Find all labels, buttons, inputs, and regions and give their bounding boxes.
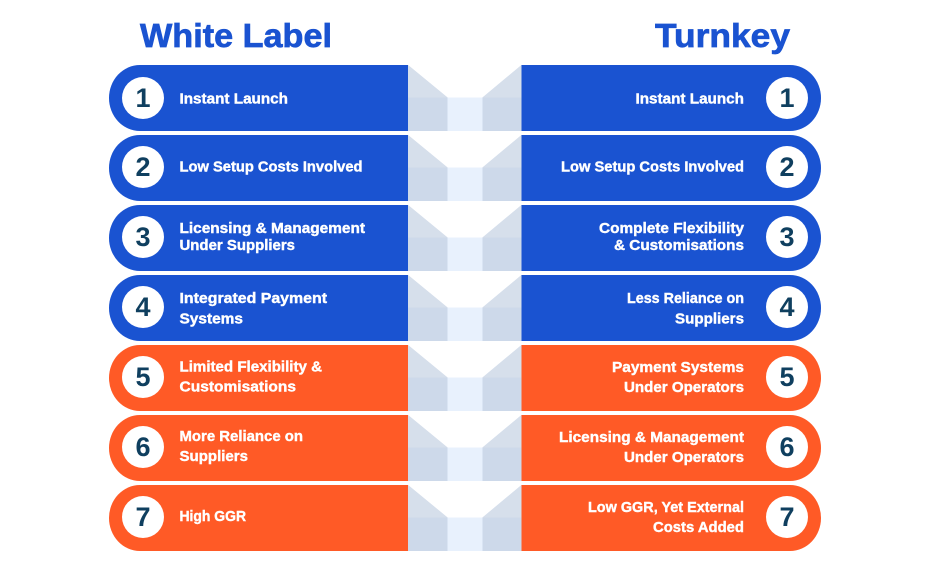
left text 3 xyxy=(180,221,365,254)
row 7 xyxy=(109,485,821,551)
left number 6: 6 xyxy=(135,432,151,462)
left number 3 xyxy=(122,216,164,258)
left text 6 xyxy=(180,429,303,465)
left text 2: Low Setup Costs Involved xyxy=(180,160,362,176)
right text 6: Licensing & Management xyxy=(559,430,744,446)
right number 5: 5 xyxy=(779,362,795,392)
left number 6 xyxy=(122,426,164,468)
left number 4 xyxy=(122,286,164,328)
left number 5 xyxy=(122,356,164,398)
right text 7: Low GGR, Yet External xyxy=(588,500,744,516)
left text 7: High GGR xyxy=(180,509,246,525)
right text 5 xyxy=(612,360,744,396)
right number 4 xyxy=(766,286,808,328)
right text 1: Instant Launch xyxy=(636,92,744,108)
right text 3: & Customisations xyxy=(614,238,744,254)
left text 6: More Reliance on xyxy=(180,429,303,445)
right number 6: 6 xyxy=(779,432,795,462)
left number 1 xyxy=(122,77,164,119)
left text 5 xyxy=(180,360,323,396)
right text 2: Low Setup Costs Involved xyxy=(561,160,744,176)
left text 4 xyxy=(180,291,327,328)
row 4 xyxy=(109,275,821,341)
right text 4 xyxy=(627,291,744,328)
left text 3: Under Suppliers xyxy=(180,238,295,254)
right bar 3 xyxy=(522,205,821,271)
row 6 xyxy=(109,415,821,481)
row 1 xyxy=(109,65,821,131)
right text 5: Under Operators xyxy=(624,380,744,396)
left text 5: Limited Flexibility & xyxy=(180,360,323,376)
left text 5: Customisations xyxy=(180,380,296,396)
connector 5 xyxy=(408,345,522,411)
right number 2 xyxy=(766,146,808,188)
right text 4: Suppliers xyxy=(675,312,744,328)
right text 6: Under Operators xyxy=(624,450,744,466)
right text 7: Costs Added xyxy=(653,520,744,536)
connector 2 xyxy=(408,135,522,201)
left text 4: Systems xyxy=(180,312,243,328)
left bar 5 xyxy=(109,345,408,411)
right number 3 xyxy=(766,216,808,258)
right bar 5 xyxy=(522,345,821,411)
left bar 1 xyxy=(109,65,408,131)
right number 7: 7 xyxy=(779,502,795,532)
right bar 2 xyxy=(522,135,821,201)
row 2 xyxy=(109,135,821,201)
right number 2: 2 xyxy=(779,152,795,182)
right bar 6 xyxy=(522,415,821,481)
connector 6 xyxy=(408,415,522,481)
right number 3: 3 xyxy=(779,222,795,252)
row 3 xyxy=(109,205,821,271)
title: Turnkey: Turnkey xyxy=(655,17,791,54)
right number 1 xyxy=(766,77,808,119)
connector 4 xyxy=(408,275,522,341)
right text 5: Payment Systems xyxy=(612,360,744,376)
left number 7: 7 xyxy=(135,502,151,532)
left number 2 xyxy=(122,146,164,188)
left text 4: Integrated Payment xyxy=(180,291,327,307)
right bar 7 xyxy=(522,485,821,551)
left number 2: 2 xyxy=(135,152,151,182)
left number 7 xyxy=(122,496,164,538)
left number 3: 3 xyxy=(135,222,151,252)
left number 1: 1 xyxy=(135,83,151,113)
left number 4: 4 xyxy=(135,292,151,322)
row 5 xyxy=(109,345,821,411)
right number 5 xyxy=(766,356,808,398)
title: White Label: White Label xyxy=(140,17,332,54)
right text 7 xyxy=(588,500,744,536)
left bar 6 xyxy=(109,415,408,481)
connector 7 xyxy=(408,485,522,551)
left text 6: Suppliers xyxy=(180,449,248,465)
left number 5: 5 xyxy=(135,362,151,392)
right bar 4 xyxy=(522,275,821,341)
connector 1 xyxy=(408,65,522,131)
right number 1: 1 xyxy=(779,83,795,113)
right text 4: Less Reliance on xyxy=(627,291,744,307)
left bar 3 xyxy=(109,205,408,271)
connector 3 xyxy=(408,205,522,271)
left text 3: Licensing & Management xyxy=(180,221,365,237)
right text 3 xyxy=(599,221,744,254)
right text 6 xyxy=(559,430,744,466)
left text 1: Instant Launch xyxy=(180,92,288,108)
right number 6 xyxy=(766,426,808,468)
right bar 1 xyxy=(522,65,821,131)
left bar 2 xyxy=(109,135,408,201)
right number 7 xyxy=(766,496,808,538)
right text 3: Complete Flexibility xyxy=(599,221,744,237)
left bar 7 xyxy=(109,485,408,551)
right number 4: 4 xyxy=(779,292,795,322)
left bar 4 xyxy=(109,275,408,341)
